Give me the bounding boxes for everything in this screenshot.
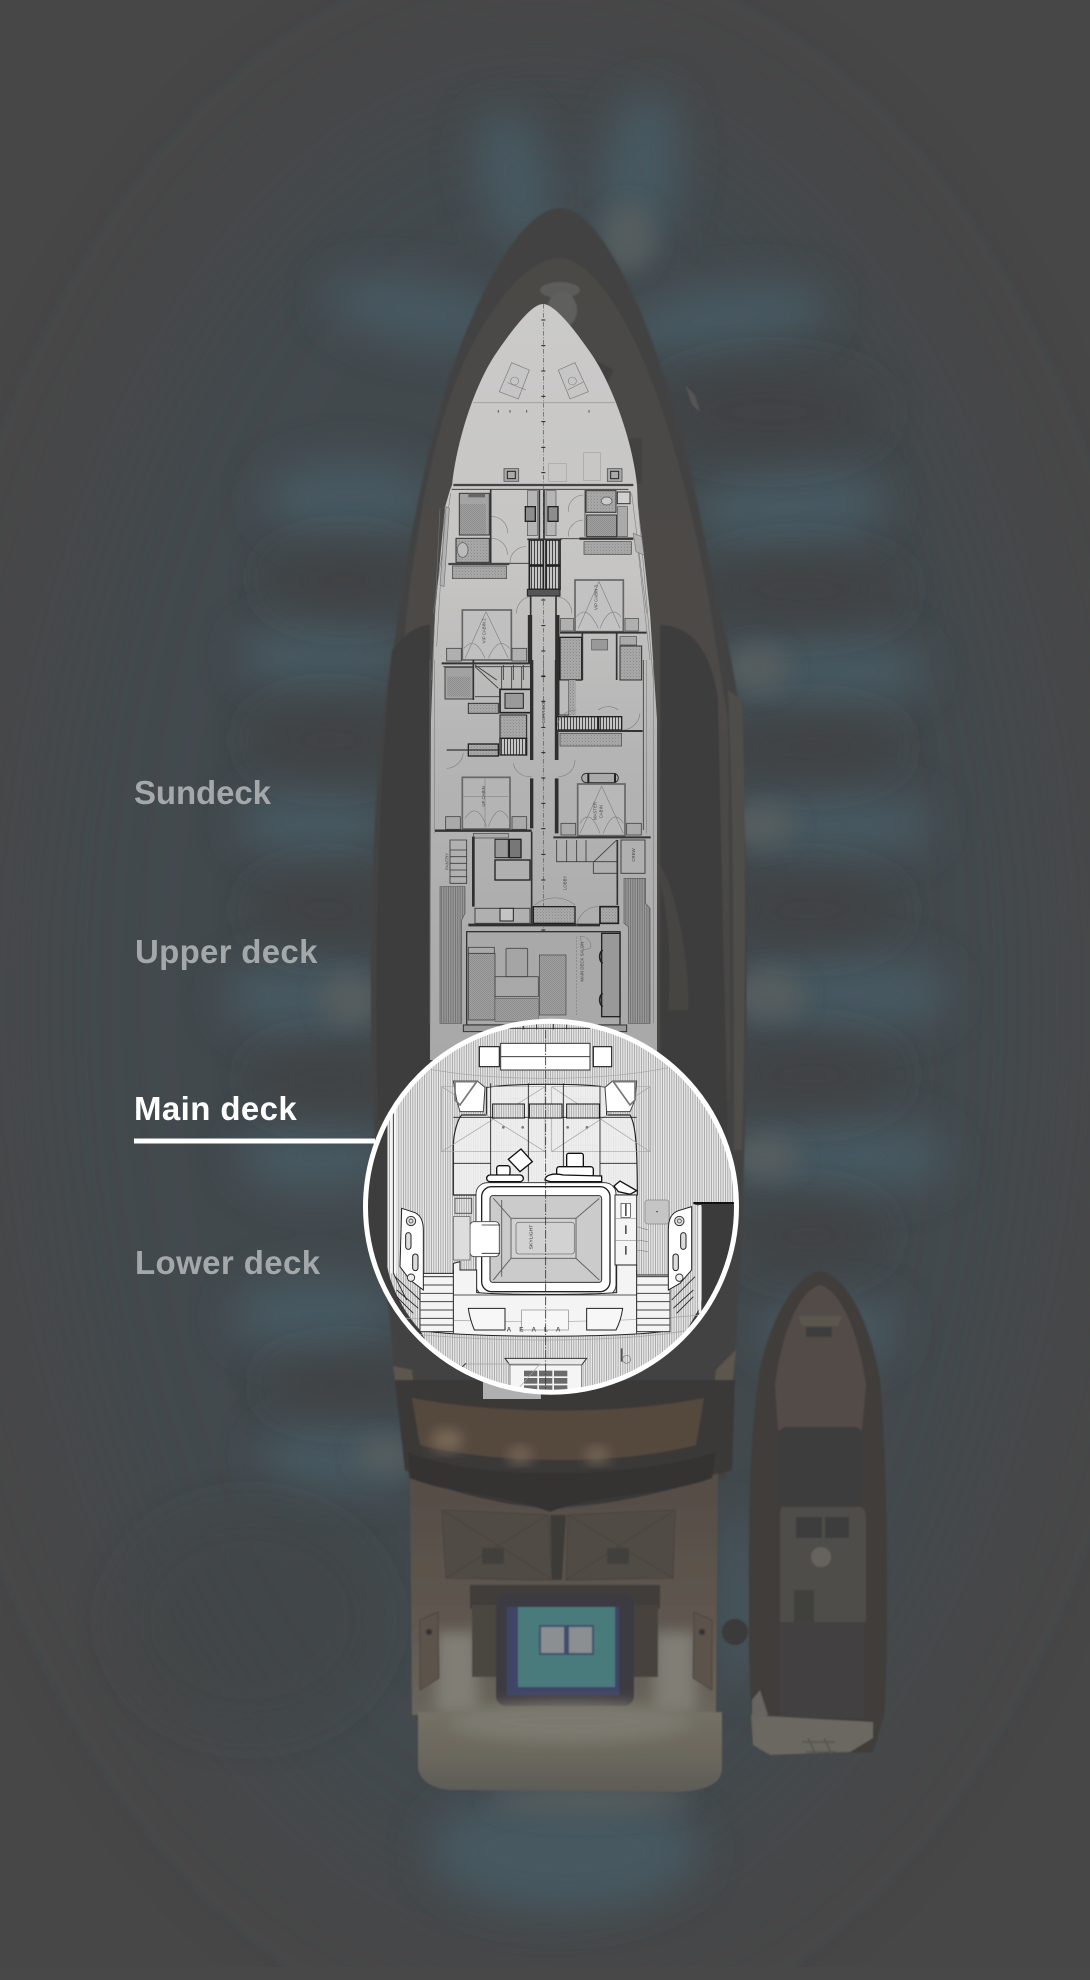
aft deck stern band: [380, 1262, 700, 1340]
magnified plan: [360, 1017, 743, 1400]
hull shadow left: [368, 1124, 426, 1340]
side light trim: [393, 690, 745, 1450]
skylight: SKYLIGHT: [529, 1225, 535, 1249]
hull outer: [371, 208, 747, 1480]
teak deck hatch: [387, 1024, 734, 1387]
salon and aft cabins drawing: MAIN DECK SALON: [579, 942, 584, 982]
salon and aft cabins drawing: CORRIDOR: [541, 700, 546, 723]
salon and aft cabins drawing: CABIN: [599, 805, 604, 818]
foredeck: [398, 258, 730, 1100]
side lockers: [420, 1612, 712, 1690]
fender: [722, 1619, 748, 1645]
yacht photograph layer: [371, 208, 887, 1792]
dark crease at stern: [408, 1452, 716, 1512]
bow and cabins drawing: VIP CABIN 3: [594, 584, 599, 610]
main deck magnifier: [360, 1017, 743, 1400]
deck trunk panels: [442, 1510, 675, 1580]
cockpit lounge: [442, 1081, 650, 1195]
hull shadow right: [688, 1204, 734, 1328]
port davit pod: [395, 1208, 423, 1313]
salon and aft cabins drawing: LOBBY: [563, 875, 568, 890]
salon and aft cabins drawing: [430, 660, 653, 1032]
infographic canvas: [134, 82, 964, 1926]
center line: [544, 1030, 547, 1388]
platform glow: [450, 1702, 690, 1742]
plan sheet: [430, 304, 657, 1060]
pantry unit: [453, 1195, 669, 1265]
salon and aft cabins drawing: UP CABIN: [481, 786, 486, 807]
swim platform: [418, 1712, 722, 1792]
skylight: [470, 1183, 616, 1296]
salon and aft cabins drawing: PANTRY: [444, 853, 449, 870]
lounge chairs: [487, 1149, 637, 1194]
bow and cabins drawing: VIP CABIN 2: [481, 618, 486, 643]
label: Lower deck: Lower deck: [135, 1244, 321, 1281]
stern hatch grid: [462, 1348, 631, 1392]
leader line to magnifier: [134, 1138, 375, 1144]
salon and aft cabins drawing: MASTER: [593, 802, 598, 820]
label: Sundeck: Sundeck: [134, 774, 272, 811]
starboard davit pod: [668, 1207, 695, 1313]
aft deck: [410, 1473, 718, 1715]
side steps: [420, 1277, 670, 1332]
deck plan: forward section: [430, 304, 657, 1060]
aft deck stern band: AEALA: [507, 1326, 568, 1333]
plan fragment below circle: [483, 1375, 541, 1399]
stern cockpit windows: [395, 1380, 735, 1508]
side highlights: [436, 1632, 696, 1714]
label: Upper deck: Upper deck: [135, 933, 318, 970]
light arc lines: [430, 1068, 668, 1098]
label: Main deck active: Main deck: [134, 1090, 297, 1127]
side shadows: [376, 625, 728, 1180]
deck labels: [134, 774, 375, 1281]
pool surround: [470, 1585, 660, 1706]
tender boat: [749, 1271, 887, 1755]
bow and cabins drawing: [432, 304, 653, 680]
foredeck anchor gear: [540, 282, 700, 484]
aft bench: [479, 1024, 612, 1070]
salon and aft cabins drawing: CREW: [631, 848, 636, 862]
circle ring: [366, 1021, 736, 1392]
